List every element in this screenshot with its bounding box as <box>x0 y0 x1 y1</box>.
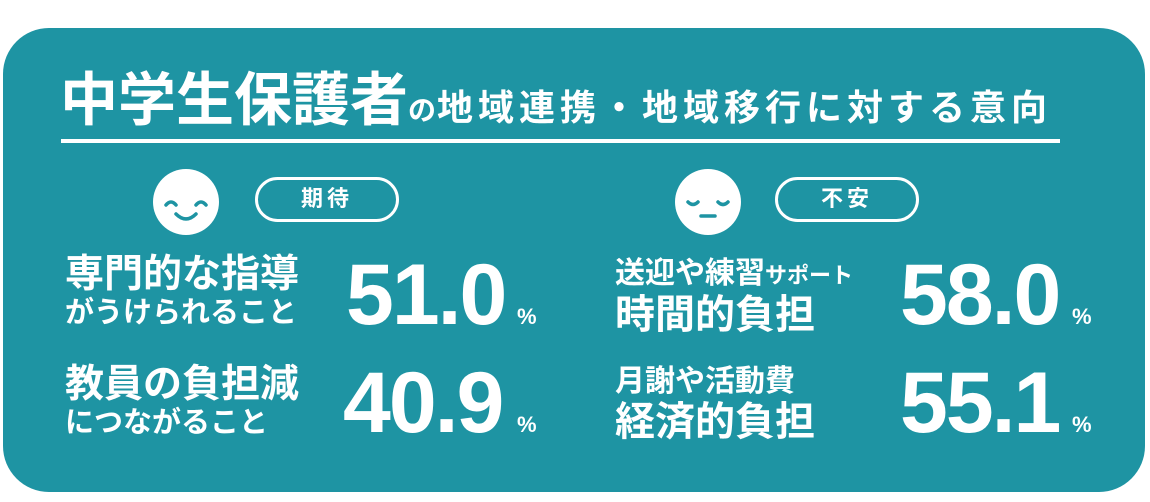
text: % <box>1072 304 1092 329</box>
pill: anxiety: 不安 <box>821 186 873 211</box>
item: time burden <box>615 257 853 337</box>
item: economic burden: 経済的負担 <box>615 400 815 444</box>
item: economic burden: 月謝や活動費 <box>615 365 795 398</box>
item: time burden: 時間的負担 <box>615 293 815 337</box>
pill: expectation: 期待 <box>301 186 353 211</box>
title underline <box>61 139 1060 143</box>
icon: anxious face <box>675 169 741 235</box>
text: % <box>517 304 537 329</box>
text: % <box>517 412 537 437</box>
item: specialized instruction <box>65 253 299 329</box>
item: teacher burden: につながること <box>65 407 268 439</box>
number 40.9: 40.9 <box>343 355 502 451</box>
number 55.1: 55.1 <box>900 355 1059 451</box>
item: teacher burden: 教員の負担減 <box>65 363 299 406</box>
pill: expectation <box>255 177 399 222</box>
icon: happy face <box>153 169 219 235</box>
text: % <box>1072 412 1092 437</box>
item: specialized instruction: がうけられること <box>65 297 297 329</box>
item: time burden: 送迎や練習サポート <box>615 257 853 290</box>
item: specialized instruction: 専門的な指導 <box>65 253 299 296</box>
number 51.0: 51.0 <box>346 247 505 343</box>
title: 中学生保護者の地域連携・地域移行に対する意向 <box>60 68 1052 133</box>
item: teacher burden <box>65 363 299 439</box>
item: economic burden <box>615 365 815 444</box>
pill: anxiety <box>775 177 919 222</box>
number 58.0: 58.0 <box>900 247 1059 343</box>
